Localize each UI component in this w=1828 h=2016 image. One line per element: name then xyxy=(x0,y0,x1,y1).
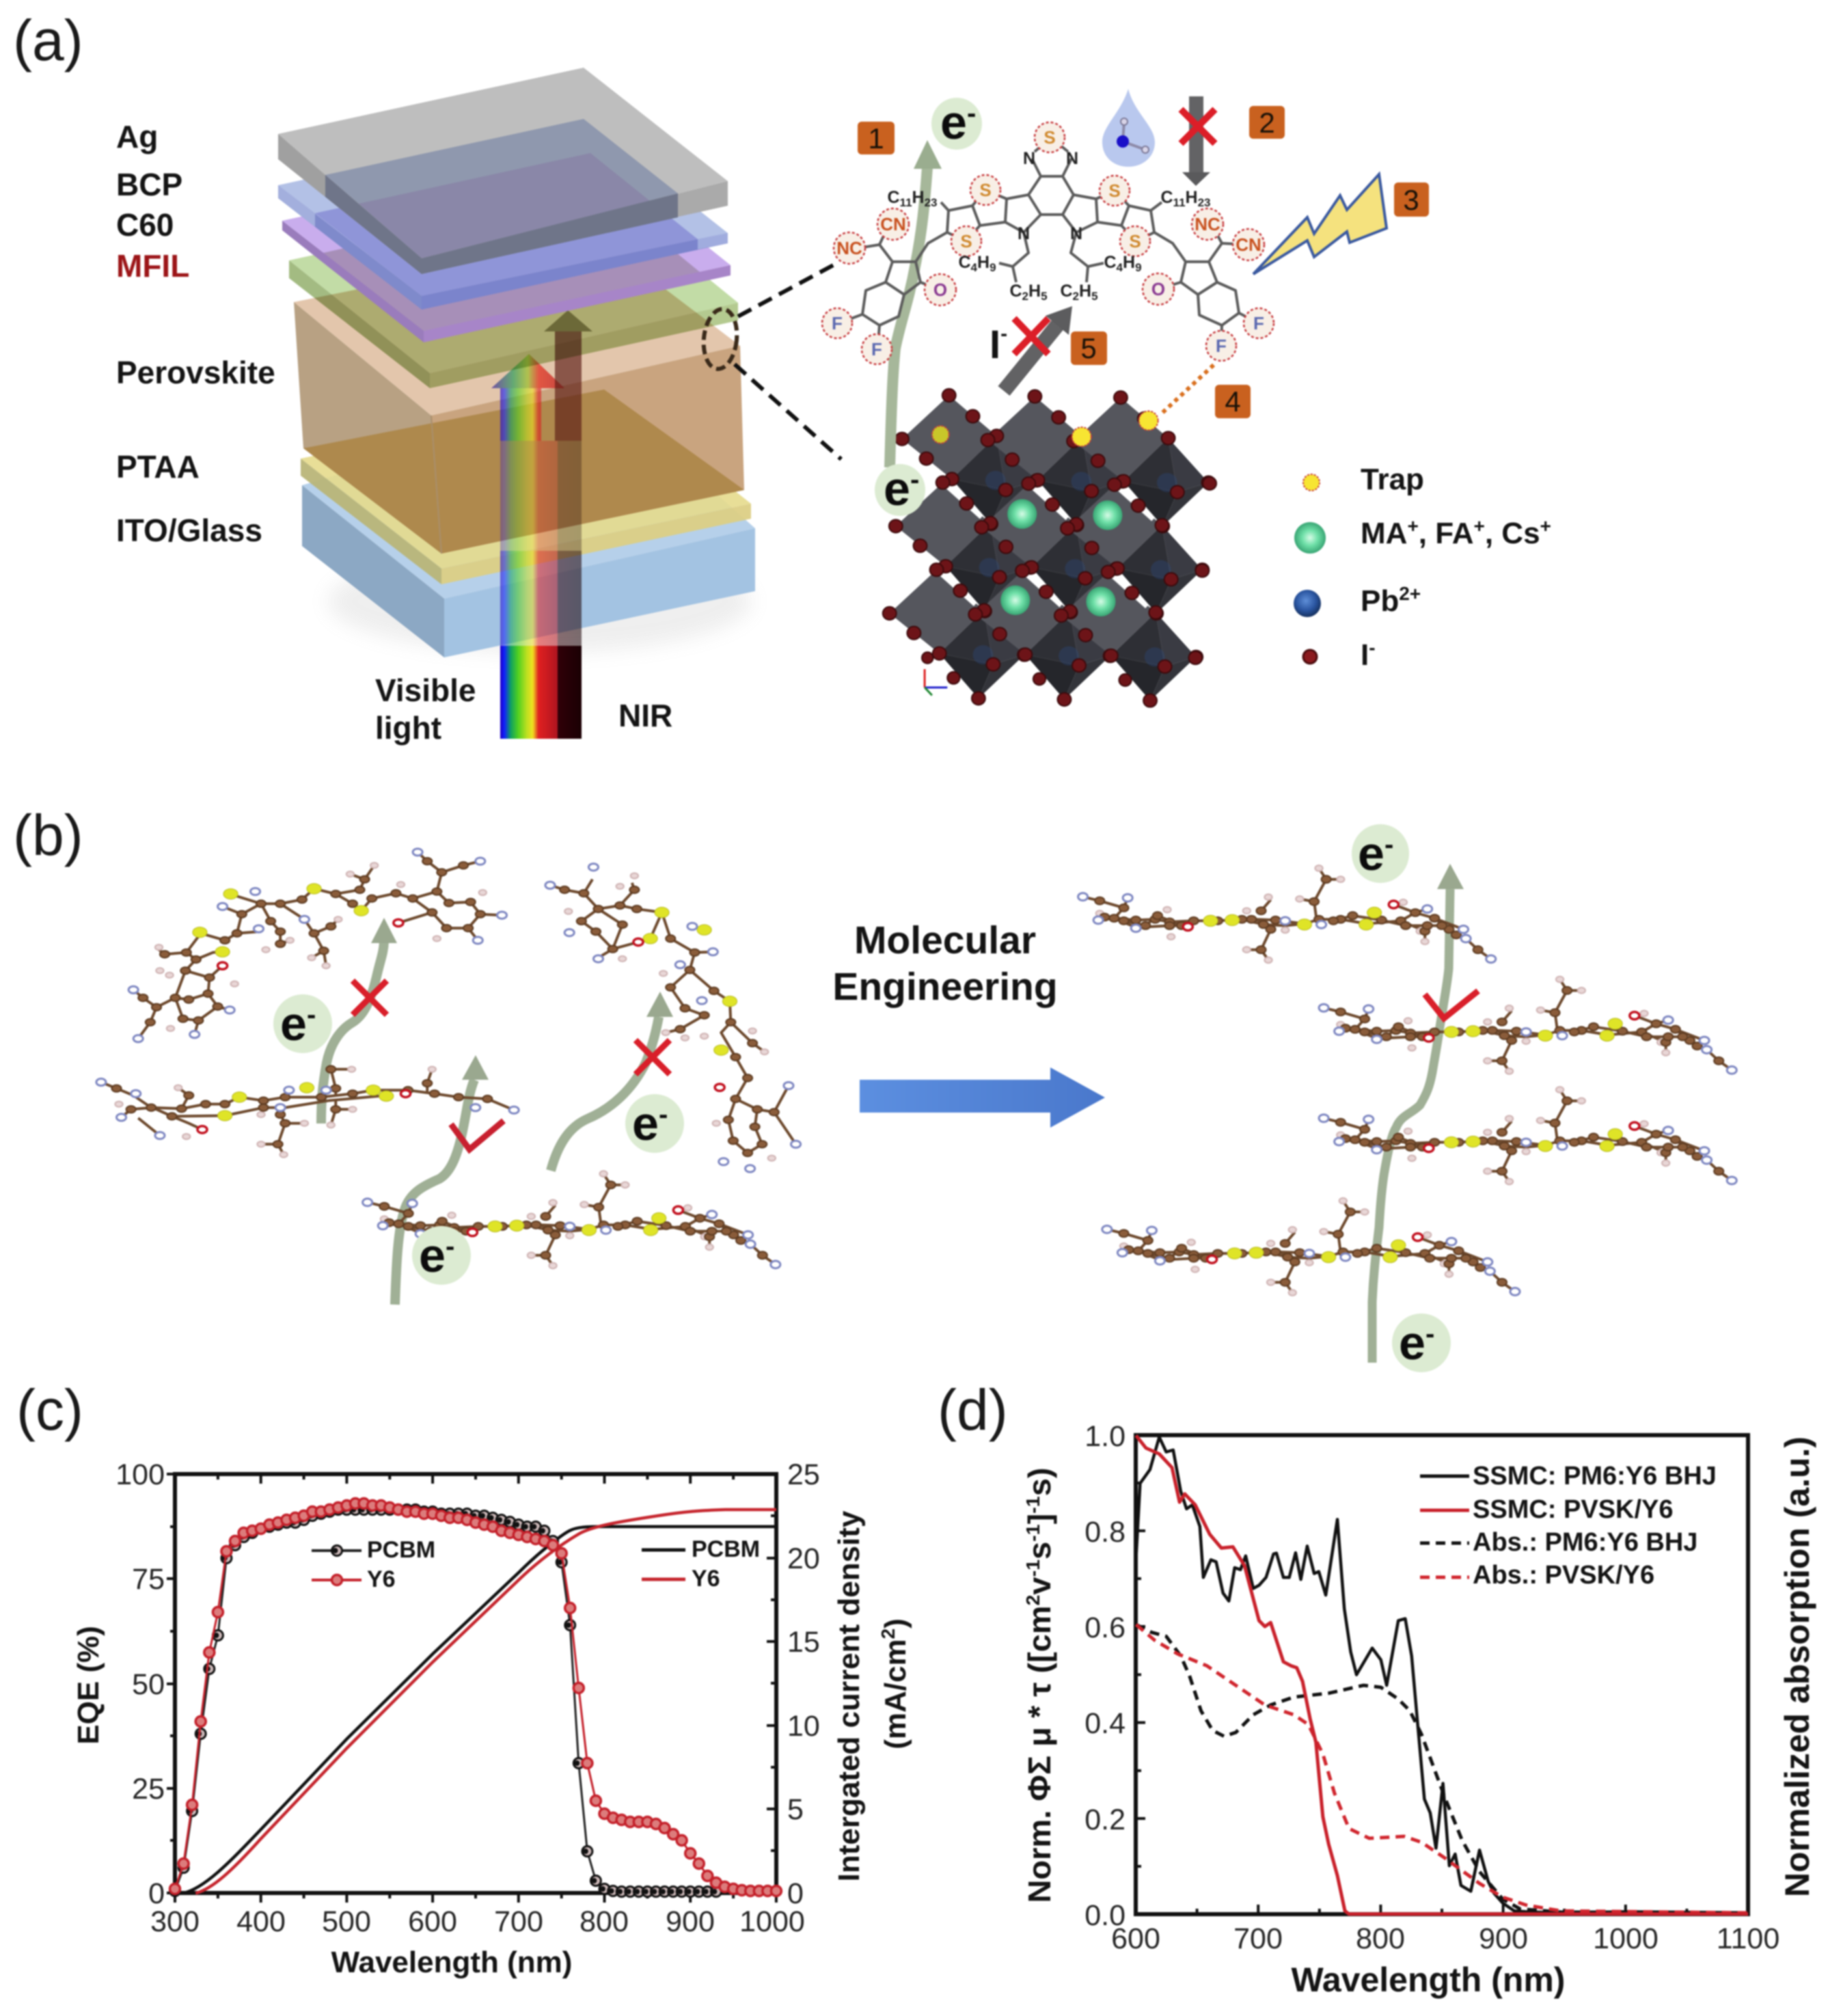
panel: disordered molecules, left xyxy=(96,849,801,1305)
atom labels: C xyxy=(1009,282,1022,301)
legend: EQE series: PCBM xyxy=(367,1537,435,1563)
atom labels: H xyxy=(977,253,990,272)
x axis labels: 700 xyxy=(494,1905,543,1938)
atom labels: H xyxy=(1028,282,1041,301)
electron badge, bottom: e xyxy=(1399,1316,1425,1370)
molecule bonds xyxy=(844,142,1259,346)
left axis labels: 100 xyxy=(115,1458,165,1491)
x axis labels: 800 xyxy=(1356,1922,1405,1955)
atom labels: N xyxy=(1070,224,1082,243)
stack labels: MFIL xyxy=(116,248,189,284)
left axis title: -1 xyxy=(1022,1524,1043,1542)
x axis labels: 1100 xyxy=(1717,1922,1779,1955)
atom labels: 5 xyxy=(1041,290,1048,303)
arrow 5: blocked iodide migration: I xyxy=(990,323,1000,367)
legend: lattice species: MA xyxy=(1361,517,1407,550)
arrow 2: blocked moisture xyxy=(1181,96,1215,186)
molecule: flat centre left xyxy=(96,1066,519,1158)
atom labels: 11 xyxy=(900,196,912,209)
legend: SSMC and absorption series: SSMC: PVSK/Y6 xyxy=(1473,1495,1674,1524)
stacked molecules xyxy=(1078,865,1736,1296)
electron badge, top: e xyxy=(1358,827,1384,880)
icon: lightning bolt xyxy=(1253,174,1387,274)
number badge 4: 4 xyxy=(1225,385,1241,418)
left axis title: ] xyxy=(1022,1514,1057,1524)
legend: SSMC and absorption series xyxy=(1420,1462,1717,1590)
electron badge xyxy=(412,1226,471,1285)
molecule: Y6 structure xyxy=(822,122,1274,364)
series: SSMC PVSK/Y6 xyxy=(1136,1436,1748,1914)
number badge 1 xyxy=(858,122,895,154)
heading: Molecular Engineering xyxy=(832,918,1058,1009)
atom labels: H xyxy=(1186,188,1198,207)
arrow 5: blocked iodide migration: - xyxy=(1000,323,1007,345)
legend: lattice species: , FA xyxy=(1419,517,1473,550)
left axis title: s xyxy=(1022,1542,1057,1559)
legend: lattice species: I xyxy=(1361,638,1369,672)
stack labels: C60 xyxy=(116,207,174,243)
y axis labels: 0.8 xyxy=(1084,1516,1126,1549)
molecule: bent right xyxy=(545,864,801,1172)
stack labels: Perovskite xyxy=(116,355,275,390)
y axis labels: 0.4 xyxy=(1084,1707,1126,1740)
atom labels: O xyxy=(933,280,947,300)
electron badge: e xyxy=(632,1097,659,1150)
red X mark: upper path xyxy=(353,981,387,1015)
layer: PTAA xyxy=(301,393,751,584)
y axis labels: 0.2 xyxy=(1084,1803,1126,1836)
legend: EQE series: Y6 xyxy=(367,1566,396,1592)
electron badge: - xyxy=(446,1231,454,1262)
panel: SSMC and absorption chart xyxy=(1022,1420,1816,1999)
electron badge: - xyxy=(659,1100,668,1130)
atom labels: F xyxy=(1216,336,1227,356)
number badge 5 xyxy=(1071,331,1107,365)
y axis labels: 1.0 xyxy=(1084,1420,1126,1453)
number badge 3 xyxy=(1394,182,1429,217)
atom labels: S xyxy=(979,180,992,200)
heading: Molecular Engineering: Molecular xyxy=(854,918,1036,962)
arrow: blue process arrow xyxy=(860,1067,1105,1128)
number badge 2 xyxy=(1249,106,1285,139)
layer: BCP xyxy=(278,119,728,310)
atom labels: 4 xyxy=(1117,261,1123,274)
right axis labels: 10 xyxy=(787,1710,820,1743)
atom labels: CN xyxy=(880,214,906,234)
right axis labels xyxy=(787,1458,820,1910)
x axis labels: 1000 xyxy=(739,1905,805,1938)
legend: SSMC and absorption series: Abs.: PVSK/Y6 xyxy=(1473,1561,1654,1590)
atom labels: 2 xyxy=(1022,290,1028,303)
electron badge, bottom: - xyxy=(1425,1319,1434,1349)
atom labels: 11 xyxy=(1173,196,1186,209)
stack shadow xyxy=(328,550,752,653)
crystal structure: perovskite lattice xyxy=(883,389,1216,707)
electron badge, top: - xyxy=(1384,830,1393,860)
red X mark: right path xyxy=(636,1040,670,1074)
arrow and marks: blocked path, right xyxy=(551,992,673,1171)
legend: lattice species: + xyxy=(1473,515,1485,536)
arrow and mark: transport path, centre xyxy=(395,1055,489,1305)
left axis labels: 75 xyxy=(132,1563,165,1596)
atom labels: N xyxy=(1018,224,1030,243)
legend: SSMC and absorption series: SSMC: PM6:Y6 BHJ xyxy=(1473,1462,1717,1490)
x axis labels: 1000 xyxy=(1593,1922,1659,1955)
right axis title: 2 xyxy=(877,1629,899,1639)
atom labels: 23 xyxy=(925,196,938,209)
panel label (d): (d) xyxy=(938,1378,1008,1442)
stack labels: Visible xyxy=(375,672,476,708)
legend: EQE series xyxy=(312,1537,435,1592)
left axis labels: 50 xyxy=(132,1668,165,1701)
electron badge, upper xyxy=(931,96,982,150)
series: PCBM EQE xyxy=(175,1510,716,1892)
x axis labels xyxy=(150,1905,805,1938)
dotted trap-passivation line xyxy=(1162,365,1214,413)
atom labels: C xyxy=(1160,188,1173,207)
right axis title: Normalized absorption (a.u.) xyxy=(1778,1436,1816,1897)
electron badge, lower: - xyxy=(910,465,919,495)
atom labels: C xyxy=(887,188,900,207)
right axis title: (mA/cm xyxy=(879,1639,912,1749)
atom labels: N xyxy=(1023,149,1035,168)
x axis labels: 900 xyxy=(666,1905,715,1938)
arrow: ordered electron path xyxy=(1372,864,1464,1363)
atom labels: 5 xyxy=(1091,290,1098,303)
atom labels xyxy=(832,127,1264,359)
number badge 2: 2 xyxy=(1259,107,1275,139)
number badge 3: 3 xyxy=(1403,184,1419,216)
light beam: visible and NIR xyxy=(491,310,592,739)
right axis title: ) xyxy=(879,1618,912,1629)
x axis title: Wavelength (nm) xyxy=(1292,1961,1565,1999)
number badge 5: 5 xyxy=(1080,332,1097,364)
x axis title: Wavelength (nm) xyxy=(331,1946,572,1979)
x axis labels: 300 xyxy=(150,1905,200,1938)
legend: lattice species: Pb xyxy=(1361,584,1399,618)
right axis title: Intergated current density xyxy=(832,1510,866,1881)
atom labels: CN xyxy=(1236,234,1261,255)
axes frame and ticks xyxy=(1136,1435,1748,1914)
panel label (c): (c) xyxy=(16,1378,83,1442)
right axis labels: 25 xyxy=(787,1458,820,1491)
red check mark xyxy=(1425,991,1478,1018)
number badge 4 xyxy=(1215,385,1251,418)
series: Abs. PVSK/Y6 xyxy=(1136,1624,1748,1913)
x axis labels: 500 xyxy=(322,1905,371,1938)
left axis labels: 0 xyxy=(148,1877,165,1910)
y axis labels: 0.0 xyxy=(1084,1899,1126,1932)
atom labels: F xyxy=(1253,313,1264,333)
left axis title: 2 xyxy=(1022,1595,1043,1605)
left axis labels xyxy=(115,1458,165,1910)
left axis title: EQE (%) xyxy=(72,1626,105,1745)
red check mark xyxy=(451,1121,504,1149)
x axis labels: 600 xyxy=(1111,1922,1160,1955)
atom labels: 2 xyxy=(1073,290,1079,303)
right axis labels: 5 xyxy=(787,1793,804,1826)
atom labels: 9 xyxy=(1135,261,1142,274)
atom labels: C xyxy=(958,253,971,272)
electron badge: - xyxy=(307,1000,316,1030)
legend: integrated current series: Y6 xyxy=(692,1566,720,1592)
stack labels: BCP xyxy=(116,167,182,202)
legend: lattice species: - xyxy=(1369,637,1376,658)
heteroatom markers xyxy=(822,122,1274,364)
atom labels: S xyxy=(1043,127,1056,148)
legend: lattice species xyxy=(1294,463,1551,672)
atom labels: F xyxy=(871,339,882,359)
electron badge, lower: e xyxy=(884,462,910,515)
legend: integrated current series: PCBM xyxy=(692,1536,760,1562)
electron badge xyxy=(625,1094,684,1153)
legend: lattice species: + xyxy=(1407,515,1419,536)
icon: water drop xyxy=(1102,89,1155,167)
panel label (b): (b) xyxy=(13,803,83,867)
panel label (a): (a) xyxy=(13,8,83,72)
right axis title xyxy=(832,1510,912,1881)
series: Y6 EQE xyxy=(175,1503,776,1891)
atom labels: H xyxy=(912,188,925,207)
series: Abs. PM6:Y6 BHJ xyxy=(1136,1624,1748,1913)
electron badge, bottom xyxy=(1392,1313,1451,1372)
stack labels: light xyxy=(375,710,441,746)
arrow: electron extraction path xyxy=(890,140,942,467)
series: Y6 integrated current xyxy=(195,1510,776,1893)
stack labels: Ag xyxy=(116,119,158,154)
layer: C60 xyxy=(282,153,731,342)
atom labels: NC xyxy=(836,238,862,258)
left axis title: s) xyxy=(1022,1468,1057,1496)
number badge 1: 1 xyxy=(868,122,884,154)
atom labels: C xyxy=(1104,253,1117,272)
series: PCBM integrated current xyxy=(182,1527,776,1893)
layer: ITO/Glass xyxy=(302,396,755,657)
atom labels: H xyxy=(1079,282,1091,301)
atom labels: H xyxy=(1123,253,1135,272)
x axis labels xyxy=(1111,1922,1779,1955)
atom labels: C xyxy=(1060,282,1073,301)
atom labels: NC xyxy=(1195,214,1220,234)
electron badge: e xyxy=(419,1229,446,1282)
legend: lattice species: + xyxy=(1540,515,1551,536)
molecule: flat lower, left group xyxy=(363,1171,780,1268)
atom labels: S xyxy=(960,231,972,251)
atom labels: 9 xyxy=(990,261,996,274)
layer: MFIL xyxy=(289,191,738,388)
right axis labels: 0 xyxy=(787,1877,804,1910)
zoom callout: dashed ellipse and lines xyxy=(701,263,841,459)
legend: integrated current series xyxy=(642,1536,760,1592)
x axis labels: 400 xyxy=(236,1905,286,1938)
electron badge, lower xyxy=(875,462,925,516)
legend: SSMC and absorption series: Abs.: PM6:Y6 BHJ xyxy=(1473,1528,1697,1557)
stack labels: PTAA xyxy=(116,449,200,485)
electron badge xyxy=(273,994,332,1053)
legend: lattice species: Trap xyxy=(1361,463,1424,496)
right axis labels: 15 xyxy=(787,1626,820,1659)
left axis title: Norm. ΦΣ μ * τ ([cm xyxy=(1022,1612,1057,1903)
right axis labels: 20 xyxy=(787,1542,820,1575)
x axis labels: 800 xyxy=(579,1905,629,1938)
panel: EQE chart xyxy=(72,1458,912,1979)
atom labels: 4 xyxy=(971,261,978,274)
panel: device layer stack xyxy=(278,68,755,739)
arrow and marks: blocked path, upper xyxy=(321,918,397,1123)
left axis title: v xyxy=(1022,1577,1057,1595)
x axis labels: 600 xyxy=(408,1905,457,1938)
legend: lattice species: 2+ xyxy=(1399,583,1421,604)
left axis labels: 25 xyxy=(132,1773,165,1806)
molecules, left group xyxy=(96,849,801,1172)
atom labels: N xyxy=(1066,149,1078,168)
atom labels: S xyxy=(1129,231,1141,251)
left axis title: -1 xyxy=(1022,1496,1043,1514)
atom labels: 23 xyxy=(1198,196,1211,209)
atom labels: F xyxy=(832,313,843,333)
layer: Perovskite xyxy=(294,241,744,554)
stack labels xyxy=(116,119,672,746)
stack labels: NIR xyxy=(618,698,672,733)
x axis labels: 700 xyxy=(1233,1922,1283,1955)
electron badge, upper: e xyxy=(940,96,967,149)
electron badge: e xyxy=(280,997,307,1050)
arrow 5: blocked iodide migration xyxy=(990,306,1072,391)
panel: ordered molecules, right xyxy=(1078,824,1736,1372)
atom labels: O xyxy=(1151,279,1165,299)
electron badge, upper: - xyxy=(967,98,976,128)
y axis labels xyxy=(1084,1420,1126,1932)
electron badge, top xyxy=(1352,824,1409,883)
axes frame and ticks xyxy=(167,1474,776,1903)
heading: Molecular Engineering: Engineering xyxy=(832,965,1058,1009)
legend: lattice species: , Cs xyxy=(1485,517,1540,550)
layer: Ag xyxy=(278,68,728,274)
left axis title: -1 xyxy=(1022,1559,1043,1577)
molecule: bent upper left xyxy=(128,849,507,1042)
x axis labels: 900 xyxy=(1479,1922,1528,1955)
series: SSMC PM6:Y6 BHJ xyxy=(1136,1437,1748,1913)
y axis labels: 0.6 xyxy=(1084,1611,1126,1644)
atom labels: S xyxy=(1108,180,1121,201)
stack labels: ITO/Glass xyxy=(116,513,262,548)
